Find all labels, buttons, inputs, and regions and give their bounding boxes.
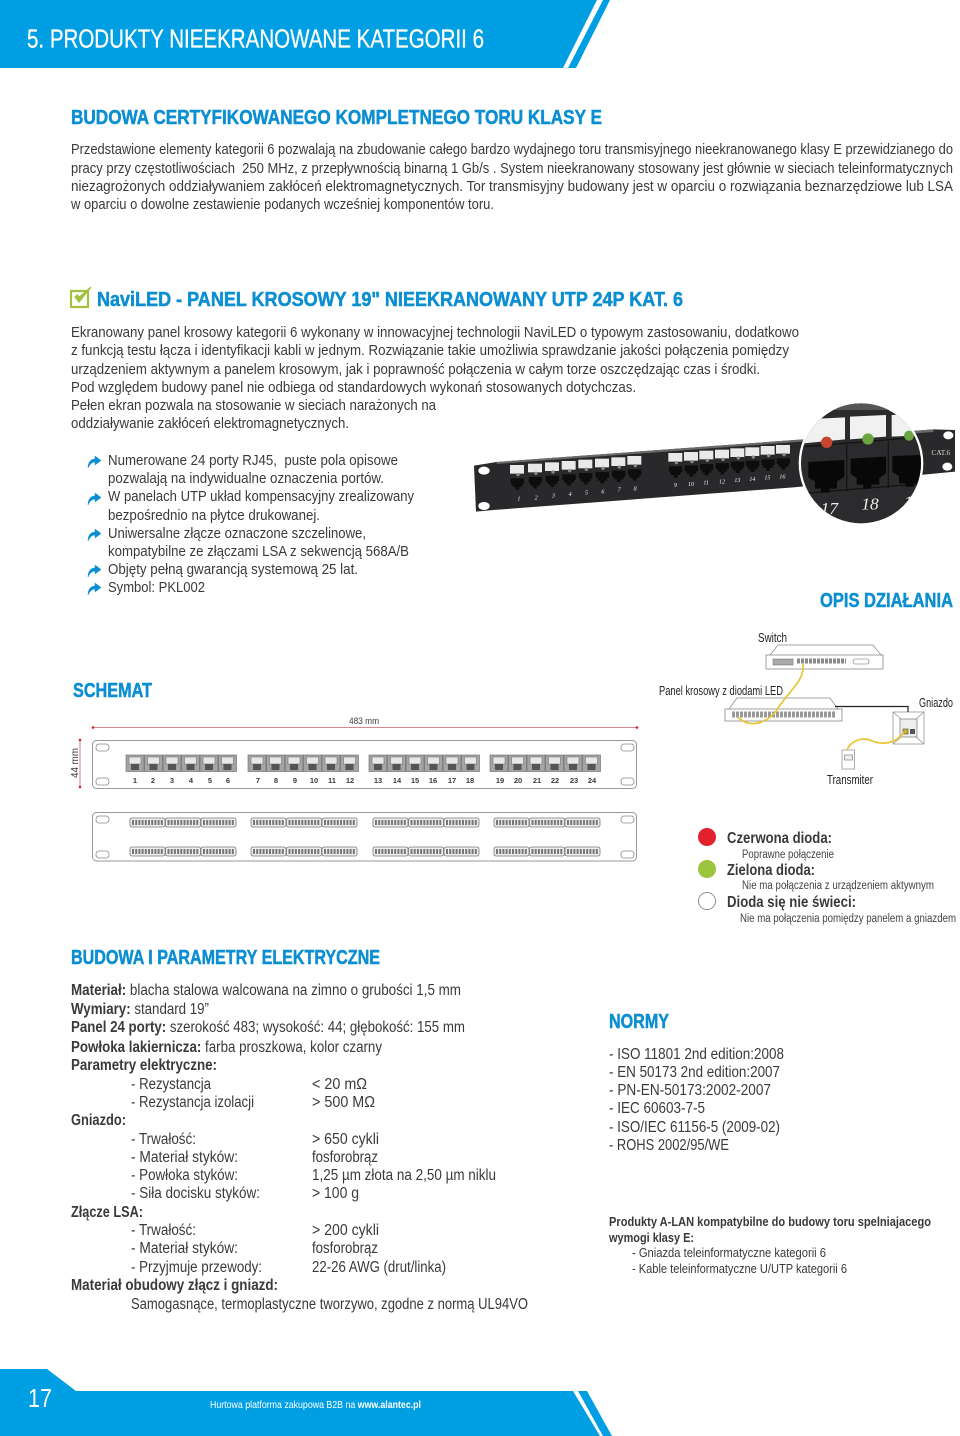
product photo: patch panel with magnified circle: 16 <box>779 474 785 480</box>
product description: z funkcją testu łącza i identyfikacji kabli w jednym. Rozwiązanie takie umożliwia sprawdzanie jakości połączenia pomiędzy <box>71 343 790 359</box>
schematic: front of panel: 12 <box>346 776 354 785</box>
feature text: Numerowane 24 porty RJ45, puste pola opisowe <box>108 453 398 469</box>
legend: LED states <box>698 828 956 925</box>
parameters list: > 200 cykli <box>312 1222 379 1239</box>
parameters list: - Materiał styków: <box>131 1240 238 1257</box>
parameters list: - Siła docisku styków: <box>131 1185 260 1202</box>
product photo: patch panel with magnified circle: 8 <box>634 487 637 493</box>
parameters list: fosforobrąz <box>312 1149 378 1166</box>
schematic: front of panel: 14 <box>393 776 402 785</box>
schematic: front of panel: 16 <box>429 776 437 785</box>
parameters list: - Trwałość: <box>131 1131 196 1148</box>
compatible products note <box>608 1215 931 1276</box>
footer text: Hurtowa platforma zakupowa B2B na www.alantec.pl <box>210 1400 421 1411</box>
dimension: height 44 mm <box>69 739 81 788</box>
parameters list: fosforobrąz <box>312 1240 378 1257</box>
parameters list: - Rezystancja <box>131 1076 211 1093</box>
schematic: front of panel: 24 <box>588 776 597 785</box>
parameters list: > 100 g <box>312 1185 359 1202</box>
schematic: front of panel: 8 <box>274 776 278 785</box>
page title: 5. PRODUKTY NIEEKRANOWANE KATEGORII 6 <box>27 24 484 54</box>
product photo: patch panel with magnified circle: 3 <box>551 494 555 500</box>
schematic: front of panel: 22 <box>551 776 559 785</box>
dimension: width 483 mm: 483 mm <box>349 716 379 727</box>
schematic: front of panel: 18 <box>466 776 474 785</box>
red LED <box>698 828 716 846</box>
product photo: patch panel with magnified circle: 2 <box>535 495 538 501</box>
parameters list: 22-26 AWG (drut/linka) <box>312 1259 446 1276</box>
feature list <box>88 453 415 596</box>
cables <box>738 664 908 750</box>
schematic: front of panel: 21 <box>533 776 541 785</box>
product description <box>71 325 799 432</box>
diagram: operating principle <box>659 631 953 787</box>
icon: bullet arrow 2 <box>88 493 101 505</box>
icon: bullet arrow 4 <box>88 565 101 577</box>
parameters list: > 500 MΩ <box>312 1094 375 1111</box>
schematic: front of panel: 19 <box>496 776 504 785</box>
standards list: - EN 50173 2nd edition:2007 <box>609 1064 780 1081</box>
legend text <box>727 830 956 925</box>
patch panel <box>725 698 842 721</box>
switch <box>766 645 883 669</box>
standards list: - IEC 60603-7-5 <box>609 1100 705 1117</box>
parameters list: Samogasnące, termoplastyczne tworzywo, zgodne z normą UL94VO <box>131 1296 528 1313</box>
product photo: patch panel with magnified circle: 14 <box>749 476 755 483</box>
product photo: patch panel with magnified circle: 15 <box>764 475 770 481</box>
icon: bullet arrow 5 <box>88 583 101 595</box>
product photo: patch panel with magnified circle: 10 <box>688 482 694 488</box>
labels: Switch <box>758 631 787 645</box>
header band <box>0 0 610 68</box>
legend text: Poprawne połączenie <box>742 849 834 861</box>
product photo: patch panel with magnified circle: 7 <box>618 488 622 494</box>
compatible products note: wymogi klasy E: <box>608 1231 694 1245</box>
parameters list: - Trwałość: <box>131 1222 196 1239</box>
dimension: height 44 mm: 44 mm <box>69 748 81 778</box>
labels: Transmiter <box>827 773 873 787</box>
feature text: Objęty pełną gwarancją systemową 25 lat. <box>108 562 358 578</box>
schematic: front of panel: 6 <box>226 776 230 785</box>
parameters list: Materiał obudowy złącz i gniazd: <box>71 1277 278 1294</box>
feature text: Symbol: PKL002 <box>108 580 205 596</box>
parameters list: - Powłoka styków: <box>131 1167 238 1184</box>
product description: Pod względem budowy panel nie odbiega od standardowych wykonań stosowanych dotychczas. <box>71 380 636 396</box>
parameters list: Parametry elektryczne: <box>71 1057 217 1074</box>
wall socket <box>893 712 924 744</box>
standards list: - ISO 11801 2nd edition:2008 <box>609 1046 784 1063</box>
feature text: bezpośrednio na płytce drukowanej. <box>108 508 320 524</box>
product description: urządzeniem aktywnym a panelem krosowym, jak i poprawność połączenia w całym torze oszczędzając czas i środki. <box>71 362 760 378</box>
heading: normy: NORMY <box>609 1011 670 1033</box>
product photo: patch panel with magnified circle: 13 <box>734 478 740 484</box>
product heading: NaviLED - PANEL KROSOWY 19" NIEEKRANOWANY UTP 24P KAT. 6 <box>97 289 683 311</box>
schematic: back of panel <box>92 812 636 861</box>
parameters list: Powłoka lakiernicza: farba proszkowa, kolor czarny <box>71 1039 382 1056</box>
icon: bullet arrow 1 <box>88 456 101 468</box>
feature text <box>108 453 415 596</box>
parameters list: Panel 24 porty: szerokość 483; wysokość: 44; głębokość: 155 mm <box>71 1019 465 1036</box>
section heading: budowa toru: BUDOWA CERTYFIKOWANEGO KOMPLETNEGO TORU KLASY E <box>71 107 602 129</box>
parameters list: - Przyjmuje przewody: <box>131 1259 262 1276</box>
schematic: front of panel: 17 <box>448 776 456 785</box>
parameters list: < 20 mΩ <box>312 1076 367 1093</box>
schematic: front of panel: 11 <box>328 776 336 785</box>
parameters list: - Materiał styków: <box>131 1149 238 1166</box>
schematic: front of panel: 3 <box>170 776 174 785</box>
legend text: Zielona dioda: <box>727 862 815 879</box>
compatible products note: - Gniazda teleinformatyczne kategorii 6 <box>632 1246 826 1260</box>
schematic: front of panel: 23 <box>570 776 578 785</box>
standards list: - ROHS 2002/95/WE <box>609 1137 729 1154</box>
parameters list: Złącze LSA: <box>71 1204 143 1221</box>
compatible products note: - Kable teleinformatyczne U/UTP kategorii 6 <box>632 1262 847 1276</box>
legend text: Dioda się nie świeci: <box>727 894 856 911</box>
legend text: Czerwona dioda: <box>727 830 832 847</box>
schematic: front of panel: 10 <box>310 776 318 785</box>
schematic: front of panel: 1 <box>133 776 137 785</box>
schematic: front of panel: 13 <box>374 776 382 785</box>
product description: Pełen ekran pozwala na stosowanie w sieciach narażonych na <box>71 398 437 414</box>
product photo: patch panel with magnified circle: 12 <box>719 479 725 485</box>
page number: 17 <box>28 1383 52 1413</box>
icon: green checkbox <box>71 287 91 307</box>
unlit LED <box>698 892 716 910</box>
parameters list: Materiał: blacha stalowa walcowana na zimno o grubości 1,5 mm <box>71 982 461 999</box>
product photo: patch panel with magnified circle: 1 <box>904 492 913 511</box>
product photo: patch panel with magnified circle: 11 <box>703 481 709 487</box>
parameters list: - Rezystancja izolacji <box>131 1094 254 1111</box>
labels: Panel krosowy z diodami LED <box>659 684 783 698</box>
transmitter <box>842 750 854 769</box>
product photo: patch panel with magnified circle: 1 <box>517 497 520 503</box>
feature text: kompatybilne ze złączami LSA z sekwencją 568A/B <box>108 544 409 560</box>
feature text: W panelach UTP układ kompensacyjny zrealizowany <box>108 489 415 505</box>
product photo: patch panel with magnified circle: 17 <box>821 499 839 518</box>
intro paragraph: w oparciu o dowolne zestawienie podanych wcześniej komponentów toru. <box>70 197 494 213</box>
standards list: - PN-EN-50173:2002-2007 <box>609 1082 771 1099</box>
schematic: front of panel: 4 <box>189 776 194 785</box>
feature text: pozwalają na indywidualne oznaczenia portów. <box>108 471 384 487</box>
heading: schemat: SCHEMAT <box>73 680 152 702</box>
standards list: - ISO/IEC 61156-5 (2009-02) <box>609 1119 780 1136</box>
schematic: front of panel: 2 <box>151 776 155 785</box>
parameters list: > 650 cykli <box>312 1131 379 1148</box>
product photo: patch panel with magnified circle: 9 <box>674 483 677 489</box>
product photo: patch panel with magnified circle: 18 <box>861 494 879 513</box>
schematic: front of panel <box>92 740 636 788</box>
product photo: patch panel with magnified circle: CAT.6 <box>931 448 950 457</box>
schematic: front of panel: 5 <box>208 776 212 785</box>
parameters list: Gniazdo: <box>71 1112 126 1129</box>
product description: oddziaływanie zakłóceń elektromagnetycznych. <box>71 416 349 432</box>
product description: Ekranowany panel krosowy kategorii 6 wykonany w innowacyjnej technologii NaviLED o typowym zastosowaniu, dodatkowo <box>71 325 799 341</box>
parameters list: 1,25 µm złota na 2,50 µm niklu <box>312 1167 496 1184</box>
green LED <box>698 860 716 878</box>
schematic: front of panel: 20 <box>514 776 522 785</box>
schematic: front of panel: 9 <box>293 776 297 785</box>
footer band <box>0 1369 612 1436</box>
schematic: front of panel: 15 <box>411 776 419 785</box>
labels <box>659 631 953 787</box>
icon: bullet arrow 3 <box>88 529 101 541</box>
parameters list: Wymiary: standard 19” <box>71 1001 209 1018</box>
parameters list <box>71 982 528 1313</box>
product photo: patch panel with magnified circle: 4 <box>569 491 572 498</box>
schematic: front of panel: 7 <box>256 776 260 785</box>
heading: budowa i parametry: BUDOWA I PARAMETRY ELEKTRYCZNE <box>71 947 380 969</box>
standards list <box>609 1046 784 1154</box>
product photo: patch panel with magnified circle: 5 <box>585 491 588 497</box>
product photo: patch panel with magnified circle: 6 <box>601 489 604 495</box>
intro paragraph <box>70 142 953 213</box>
feature text: Uniwersalne złącze oznaczone szczelinowe, <box>108 526 366 542</box>
product photo: patch panel with magnified circle <box>474 400 955 533</box>
